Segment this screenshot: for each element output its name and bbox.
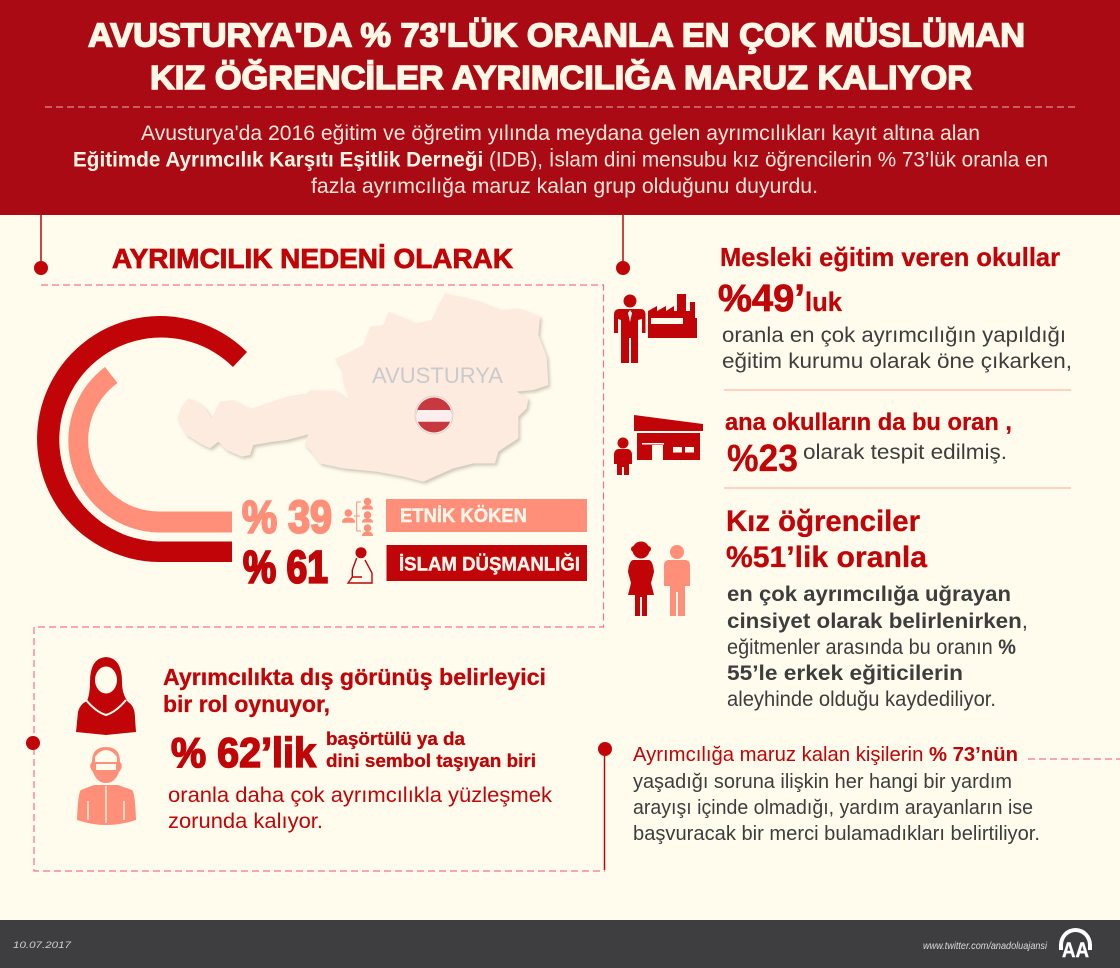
callout text: arayışı içinde olmadığı, yardım arayanların ise	[633, 796, 1033, 819]
text: gender: en çok ayrımcılığa uğrayan	[727, 583, 1011, 606]
heading: vocational schools: Mesleki eğitim veren okullar	[720, 242, 1060, 272]
callout text: yaşadığı soruna ilişkin her hangi bir yardım	[633, 770, 1012, 793]
text: appearance: oranla daha çok ayrımcılıkla yüzleşmek	[168, 784, 553, 807]
heading: appearance: Ayrımcılıkta dış görünüş belirleyici	[163, 664, 546, 690]
icon: girl and boy	[628, 542, 690, 616]
figure: 49 percent	[718, 278, 843, 320]
text: vocational schools	[722, 324, 1072, 373]
title: KIZ ÖĞRENCİLER AYRIMCILIĞA MARUZ KALIYOR	[150, 59, 972, 96]
icon: kneeling figure	[348, 547, 372, 583]
figure: 49 percent: luk	[805, 287, 843, 317]
intro text: Avusturya'da 2016 eğitim ve öğretim yılında meydana gelen ayrımcılıkları kayıt altına alan	[141, 122, 980, 145]
icon: bearded man	[77, 747, 136, 825]
text: gender: cinsiyet olarak belirlenirken ,	[727, 610, 1028, 633]
icon: Austrian flag	[415, 396, 453, 434]
text: appearance	[168, 784, 553, 833]
twitter address: www.twitter.com/anadoluajansi	[923, 941, 1048, 952]
callout first line: Ayrımcılığa maruz kalan kişilerin % 73’nün	[633, 743, 1018, 766]
icon: woman with headscarf	[76, 657, 136, 735]
text: gender: aleyhinde olduğu kaydediliyor.	[727, 688, 996, 711]
label box: ethnic origin: ETNİK KÖKEN	[400, 506, 527, 527]
footer bar	[0, 920, 1120, 968]
map of Austria	[177, 293, 548, 482]
header band	[0, 0, 1120, 215]
arc: 61 percent	[37, 316, 247, 562]
heading: girl students	[726, 505, 927, 574]
figure: 62 percent: % 62’lik	[171, 729, 317, 776]
label box: ethnic origin	[386, 499, 587, 532]
text: headscarf note	[326, 728, 536, 771]
panel: vocational schools	[614, 242, 1072, 373]
text: gender	[727, 583, 1028, 711]
panel: no help sought	[633, 743, 1040, 845]
heading: reasons: AYRIMCILIK NEDENİ OLARAK	[112, 243, 513, 274]
title: AVUSTURYA'DA % 73'LÜK ORANLA EN ÇOK MÜSLÜMAN	[88, 16, 1025, 54]
label box: islamophobia: İSLAM DÜŞMANLIĞI	[399, 554, 580, 576]
panel: discrimination reasons	[37, 243, 587, 592]
text: vocational schools: eğitim kurumu olarak öne çıkarken,	[722, 350, 1072, 373]
heading: girl students: Kız öğrenciler	[726, 505, 920, 538]
text: appearance: zorunda kalıyor.	[168, 810, 323, 833]
panel: kindergartens	[614, 409, 1012, 480]
figure: 49 percent: %49’	[718, 278, 805, 320]
intro text: Eğitimde Ayrımcılık Karşıtı Eşitlik Derneği (IDB), İslam dini mensubu kız öğrencilerin % 73’lük oranla en	[73, 148, 1048, 172]
heading: kindergartens: ana okulların da bu oran ,	[725, 409, 1012, 436]
figure: 23 percent: %23	[727, 438, 798, 480]
label box: islamophobia	[386, 545, 587, 581]
panel: gender	[628, 505, 1028, 711]
title	[88, 16, 1025, 96]
date: 10.07.2017	[13, 940, 72, 951]
value: 39 percent: % 39	[242, 492, 332, 542]
text: gender: 55’le erkek eğiticilerin	[727, 662, 963, 685]
text: gender: eğitmenler arasında bu oranın %	[727, 636, 1016, 659]
icon: man and factory	[614, 294, 697, 363]
icon: AA logo	[1059, 928, 1092, 962]
icon: AA logo: AA	[1062, 939, 1089, 962]
text: kindergartens: olarak tespit edilmiş.	[803, 441, 1007, 464]
arc: 39 percent	[68, 367, 232, 532]
text: headscarf note: dini sembol taşıyan biri	[326, 750, 536, 771]
text: headscarf note: başörtülü ya da	[326, 728, 466, 749]
row: islamophobia	[243, 542, 587, 592]
heading: girl students: %51’lik oranla	[726, 541, 927, 574]
value: 61 percent: % 61	[243, 542, 328, 592]
icon: people group	[342, 498, 373, 536]
text: vocational schools: oranla en çok ayrımcılığın yapıldığı	[722, 324, 1066, 347]
callout text	[633, 770, 1040, 845]
panel: appearance	[76, 657, 553, 833]
intro text	[73, 122, 1048, 198]
intro text: fazla ayrımcılığa maruz kalan grup olduğunu duyurdu.	[311, 175, 818, 198]
row: ethnic origin	[242, 492, 587, 542]
map label: AVUSTURYA	[372, 363, 503, 388]
heading: appearance	[163, 664, 546, 717]
connector frame lines	[26, 215, 1120, 871]
icon: child and school	[614, 415, 703, 475]
heading: appearance: bir rol oynuyor,	[163, 691, 330, 717]
callout text: başvuracak bir merci bulamadıkları belirtiliyor.	[633, 822, 1040, 845]
